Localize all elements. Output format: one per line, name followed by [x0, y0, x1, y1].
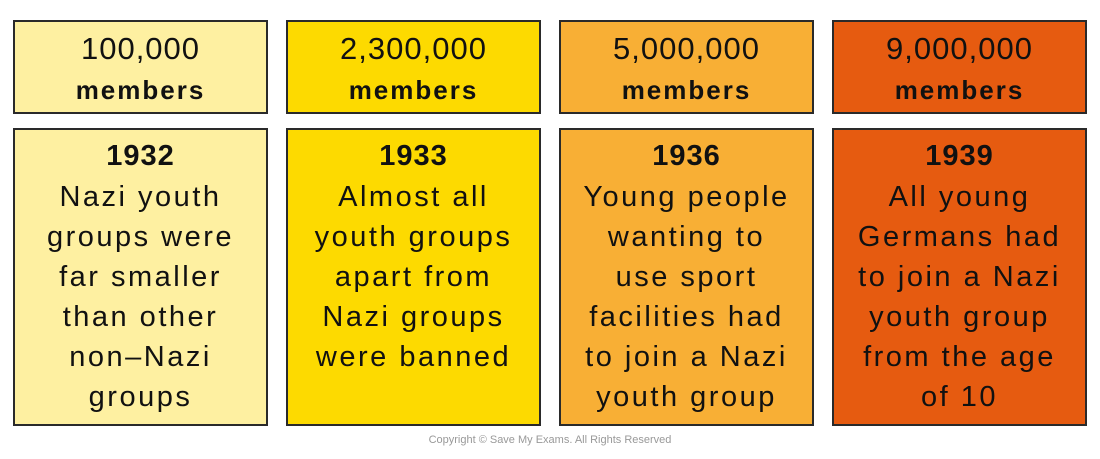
panel: 1932: than other [63, 301, 218, 333]
panel: 1936: 1936 [652, 140, 721, 172]
panel: 1932: groups [89, 381, 192, 413]
panel: 1932: Nazi youth [59, 181, 222, 213]
panel: 1939: youth group [869, 301, 1050, 333]
panel: 1939: to join a Nazi [858, 261, 1061, 293]
panel: 1932: non–Nazi [69, 341, 212, 373]
panel: 1936: youth group [596, 381, 777, 413]
panel: 100,000 members: members [76, 75, 205, 105]
panel: 1936: use sport [616, 261, 757, 293]
panel: 9,000,000 members [832, 20, 1087, 114]
panel: 1936: facilities had [589, 301, 784, 333]
panel: 2,300,000 members: 2,300,000 [340, 31, 487, 66]
panel: 1932: groups were [47, 221, 234, 253]
panel: 1936: wanting to [608, 221, 765, 253]
panel: 1939: from the age [863, 341, 1056, 373]
panel: 1936: Young people [583, 181, 790, 213]
panel: 100,000 members: 100,000 [81, 31, 200, 66]
panel: 5,000,000 members [559, 20, 814, 114]
panel: 9,000,000 members: members [895, 75, 1024, 105]
panel: 1939 [832, 128, 1087, 426]
panel: 1939: 1939 [925, 140, 994, 172]
panel: 1933: 1933 [379, 140, 448, 172]
panel: 5,000,000 members: 5,000,000 [613, 31, 760, 66]
panel: 100,000 members [13, 20, 268, 114]
panel: 1933: Almost all [338, 181, 489, 213]
panel: 1932 [13, 128, 268, 426]
panel: 1936 [559, 128, 814, 426]
panel: 2,300,000 members: members [349, 75, 478, 105]
panel: 1932: 1932 [106, 140, 175, 172]
panel: 1939: of 10 [921, 381, 998, 413]
copyright: Copyright © Save My Exams. All Rights Reserved [429, 434, 671, 446]
panel: 1939: Germans had [858, 221, 1061, 253]
panel: 1932: far smaller [59, 261, 222, 293]
panel: 2,300,000 members [286, 20, 541, 114]
panel: 1933: apart from [335, 261, 492, 293]
panel: 1933: were banned [316, 341, 511, 373]
panel: 1933 [286, 128, 541, 426]
panel: 1933: Nazi groups [322, 301, 505, 333]
panel: 1936: to join a Nazi [585, 341, 788, 373]
panel: 5,000,000 members: members [622, 75, 751, 105]
panel: 9,000,000 members: 9,000,000 [886, 31, 1033, 66]
panel: 1939: All young [889, 181, 1030, 213]
panel: 1933: youth groups [315, 221, 512, 253]
